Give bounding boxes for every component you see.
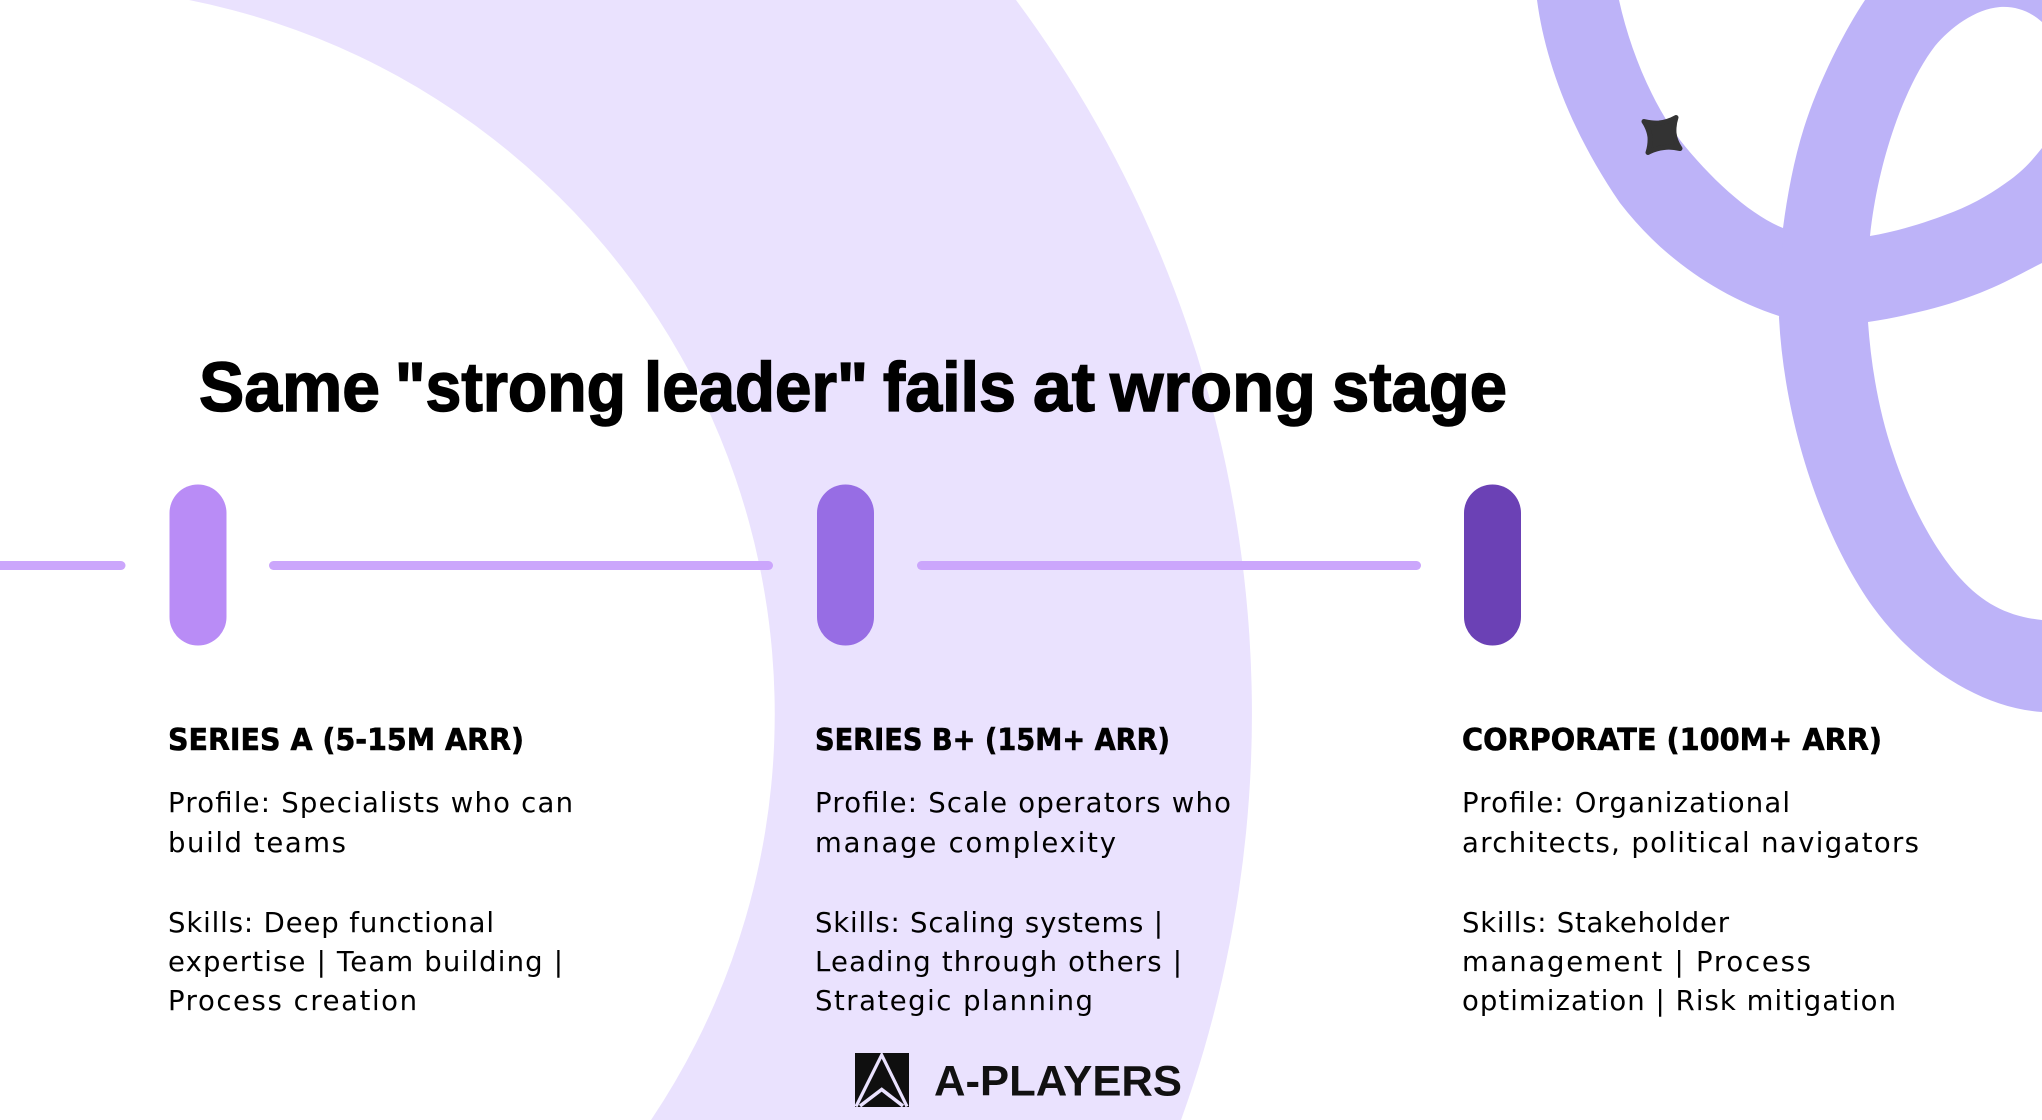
title: leader" [644,348,868,426]
profile text: Corporate: architects, political navigators [1462,827,1919,859]
title [199,348,1507,426]
skills text: Series A [168,907,563,1017]
profile text: Corporate: Profile: Organizational [1462,787,1790,819]
skills text: Corporate [1462,907,1896,1017]
skills text: Series A: Skills: Deep functional [168,907,494,939]
panel: Series A [168,723,573,1017]
title: "strong [395,348,626,426]
background: lavender arc band [189,0,1252,1120]
skills text: Series B+: Skills: Scaling systems | [815,907,1163,939]
skills text: Series B+: Leading through others | [815,946,1182,978]
title: Same [199,348,380,426]
profile text: Series B+ [815,787,1231,859]
logo: A-Players [855,1053,1182,1107]
profile text: Series B+: Profile: Scale operators who [815,787,1231,819]
icon: four-point star [1644,118,1680,152]
skills text: Series A: expertise | Team building | [168,946,563,978]
skills text: Series B+: Strategic planning [815,985,1093,1017]
marker: Corporate [1464,484,1521,646]
heading: Series B+: SERIES B+ (15M+ ARR) [815,723,1170,758]
icon: A-Players mark [855,1053,909,1107]
timeline connector: A to B [269,561,773,570]
skills text: Corporate: management | Process [1462,946,1811,978]
panel: Series B+ [815,723,1231,1017]
timeline [0,484,1521,646]
heading: Series A: SERIES A (5-15M ARR) [168,723,524,758]
skills text: Corporate: Skills: Stakeholder [1462,907,1730,939]
profile text: Series B+: manage complexity [815,827,1116,859]
profile text: Series A: Profile: Specialists who can [168,787,573,819]
timeline connector: lead-in [0,561,126,570]
skills text: Series A: Process creation [168,985,417,1017]
profile text: Series A: build teams [168,827,346,859]
profile text: Corporate [1462,787,1919,859]
decorative ribbon loop, top right [1537,0,2042,712]
timeline connector: B to corporate [917,561,1421,570]
title: at [1033,348,1095,426]
skills text: Corporate: optimization | Risk mitigation [1462,985,1896,1017]
title: stage [1332,348,1507,426]
logo wordmark: A-PLAYERS [934,1058,1182,1106]
heading: Corporate: CORPORATE (100M+ ARR) [1462,723,1882,758]
skills text: Series B+ [815,907,1182,1017]
title: wrong [1109,348,1316,426]
profile text: Series A [168,787,573,859]
marker: Series A [170,484,226,646]
title: fails [883,348,1016,426]
panel: Corporate [1462,723,1919,1017]
marker: Series B+ [817,484,874,646]
